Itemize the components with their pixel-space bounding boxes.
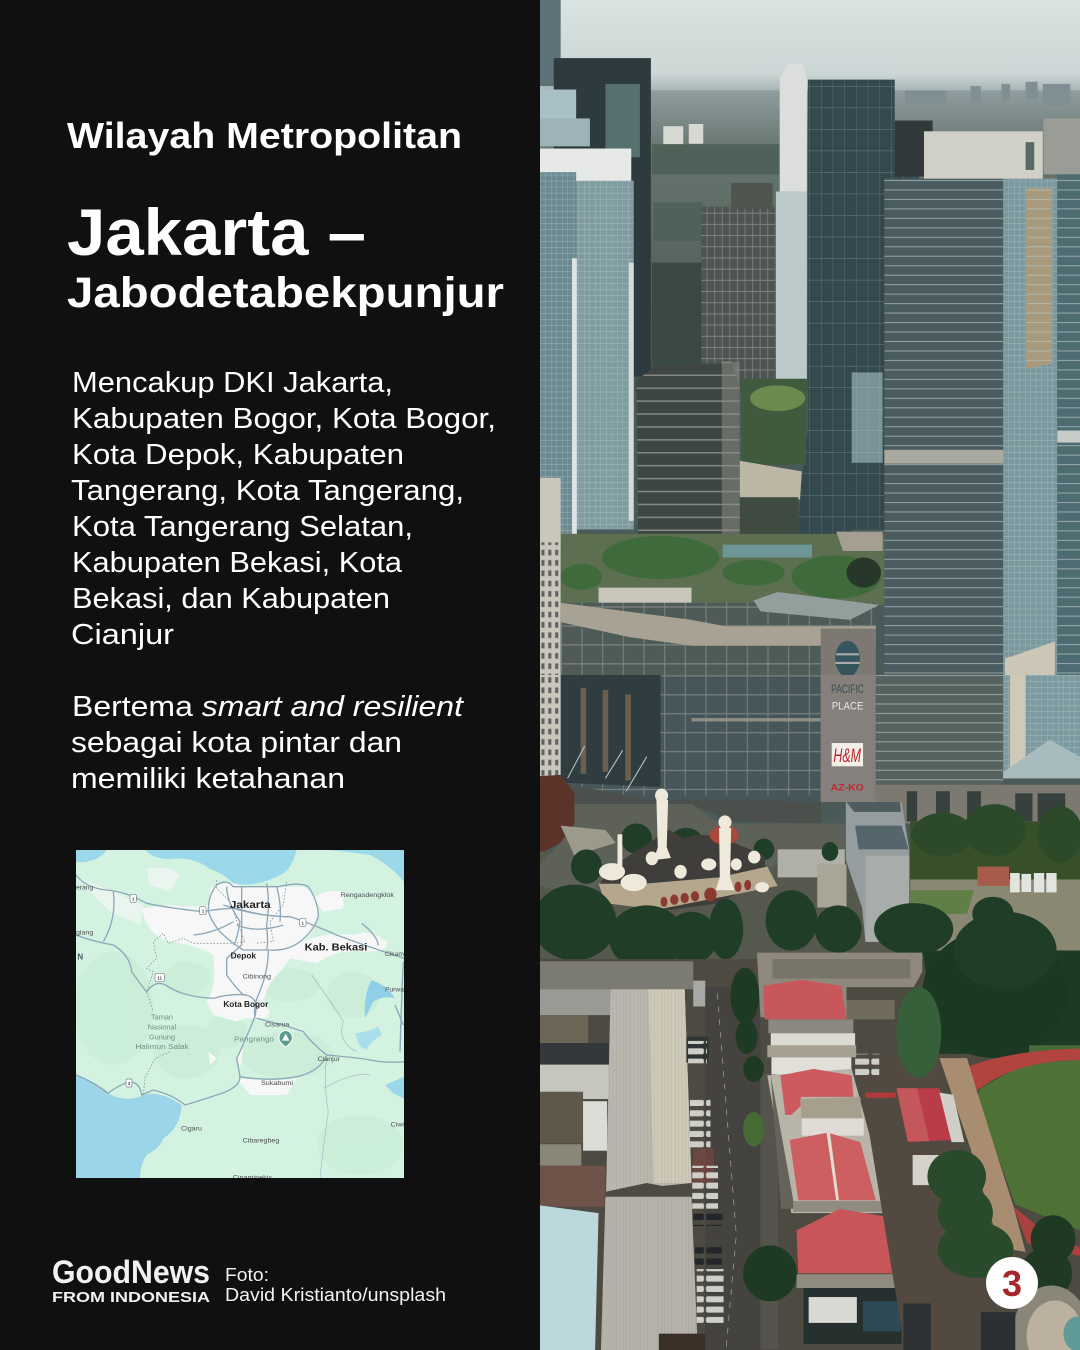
logo: GoodNews from Indonesia: FROM INDONESIA: [52, 1289, 210, 1306]
lower half: mosque, roofs, field: PACIFIC: [831, 683, 864, 696]
panel: dark left background: [0, 0, 540, 1350]
photo credit: Foto:: [225, 1264, 269, 1285]
text block: area coverage: [71, 367, 496, 651]
map of the Jakarta region: Halimun Salak: [135, 1042, 189, 1051]
map of the Jakarta region: Jakarta: [230, 900, 271, 911]
text block: area coverage: Mencakup DKI Jakarta,: [72, 367, 393, 399]
map of the Jakarta region: Depok: [231, 952, 257, 961]
lower half: mosque, roofs, field: H&M: [833, 744, 861, 766]
map of the Jakarta region: Cibinong: [243, 974, 271, 981]
heading: Wilayah Metropolitan: Wilayah Metropolitan: [67, 115, 462, 156]
map of the Jakarta region: Sukabumi: [261, 1080, 294, 1087]
map of the Jakarta region: 11: [157, 975, 163, 980]
lower half: mosque, roofs, field: [532, 675, 1080, 1350]
map of the Jakarta region: N: [77, 953, 83, 962]
text block: area coverage: Kota Depok, Kabupaten: [72, 439, 404, 471]
map of the Jakarta region: Kab. Bekasi: [305, 943, 368, 954]
photo credit: [225, 1264, 446, 1305]
text block: area coverage: Kabupaten Bekasi, Kota: [72, 547, 403, 579]
map of the Jakarta region: Kota Bogor: [223, 1000, 268, 1009]
photo credit: David Kristianto/unsplash: [225, 1284, 446, 1305]
map of the Jakarta region: Rengasdengklok: [341, 892, 395, 899]
map of the Jakarta region: Pangrango: [234, 1035, 274, 1044]
map of the Jakarta region: Nasional: [148, 1022, 177, 1031]
photo: aerial view of Jakarta skyline: [532, 0, 1080, 1350]
map of the Jakarta region: Gunung: [149, 1032, 175, 1041]
map of the Jakarta region: Cisarua: [265, 1021, 290, 1028]
text block: theme: [71, 691, 465, 795]
text block: theme: memiliki ketahanan: [71, 763, 345, 795]
logo: GoodNews from Indonesia: GoodNews: [52, 1254, 210, 1290]
map of the Jakarta region: Cikam: [385, 951, 404, 958]
map of the Jakarta region: Purwa: [385, 987, 404, 994]
map of the Jakarta region: Cinaminekis: [233, 1174, 273, 1181]
text block: theme: Bertema smart and resilient: [72, 691, 465, 723]
title: Jakarta: Jakarta –: [67, 195, 366, 269]
title: Jabodetabekpunjur: Jabodetabekpunjur: [67, 269, 504, 317]
map of the Jakarta region: glang: [76, 930, 94, 937]
page number badge: 3: [1002, 1263, 1022, 1304]
text block: theme: sebagai kota pintar dan: [71, 727, 402, 759]
map of the Jakarta region: Cigaru: [181, 1125, 202, 1132]
map of the Jakarta region: 1: [202, 909, 205, 914]
map of the Jakarta region: 1: [132, 896, 135, 901]
upper half: towers: [540, 0, 1080, 677]
logo: GoodNews from Indonesia: [52, 1254, 210, 1306]
text block: area coverage: Bekasi, dan Kabupaten: [72, 583, 390, 615]
text block: area coverage: Kota Tangerang Selatan,: [72, 511, 413, 543]
map of the Jakarta region: Taman: [151, 1012, 173, 1021]
page number badge: [986, 1257, 1038, 1309]
map of the Jakarta region: [73, 850, 405, 1181]
map of the Jakarta region: Cianjur: [318, 1056, 341, 1063]
text block: area coverage: Tangerang, Kota Tangerang,: [71, 475, 464, 507]
map of the Jakarta region: Cibaregbeg: [243, 1137, 280, 1144]
map of the Jakarta region: 3: [128, 1081, 131, 1086]
map of the Jakarta region: erang: [76, 884, 94, 891]
map of the Jakarta region: 1: [301, 920, 304, 925]
lower half: mosque, roofs, field: PLACE: [832, 701, 864, 713]
lower half: mosque, roofs, field: AZ-KO: [831, 782, 864, 793]
text block: area coverage: Kabupaten Bogor, Kota Bogor,: [72, 403, 496, 435]
text block: area coverage: Cianjur: [71, 619, 174, 651]
map of the Jakarta region: Ciwi: [391, 1121, 405, 1128]
